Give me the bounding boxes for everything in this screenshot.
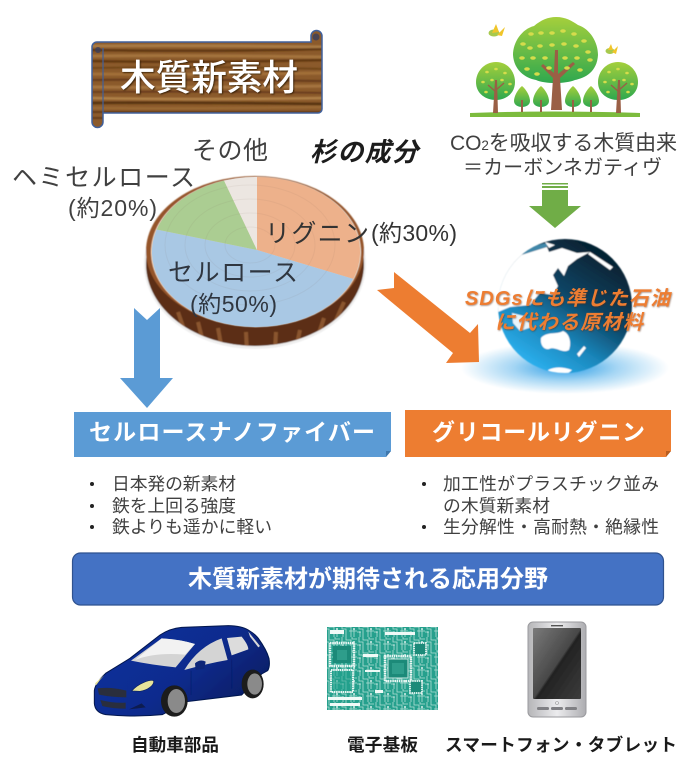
label: その他: その他 (192, 137, 268, 165)
banner: application fields: 木質新素材が期待される応用分野 (188, 565, 548, 593)
label: セルロース: (約50%) (190, 291, 277, 317)
panel: glycol lignin label: グリコールリグニン (432, 419, 645, 445)
list: glycol lignin features: 加工性がプラスチック並み (443, 474, 659, 494)
bird right (606, 44, 618, 54)
banner: application fields (72, 553, 664, 605)
label: ヘミセルロース (12, 164, 195, 221)
list: cellulose nanofiber features (90, 474, 272, 537)
top right chip (414, 643, 426, 655)
pie chart on wood slice (144, 175, 366, 349)
icon: blue car (94, 626, 269, 717)
label: リグニン: リグニン (265, 220, 369, 248)
label: セルロース: セルロース (168, 259, 298, 287)
pie slices (152, 177, 360, 327)
label: リグニン (265, 220, 457, 248)
panel: glycol lignin label (405, 410, 671, 457)
icon: circuit board (327, 627, 438, 710)
list: cellulose nanofiber features: 鉄よりも遥かに軽い (112, 517, 272, 537)
list: cellulose nanofiber features: 鉄を上回る強度 (112, 496, 236, 516)
text: carbon negative: ＝カーボンネガティヴ (463, 156, 662, 179)
wood side of slice (144, 176, 366, 352)
title: wooden scroll banner (90, 31, 325, 128)
icon: forest of trees with birds (470, 17, 640, 117)
callout: SDGs: に代わる原材料 (495, 312, 645, 334)
list: cellulose nanofiber features: 日本発の新素材 (112, 474, 236, 494)
icon: smartphone (528, 622, 586, 717)
caption: smartphones and tablets: スマートフォン・タブレット (445, 735, 677, 755)
list: glycol lignin features: の木質新素材 (443, 496, 550, 516)
title text: 木質新素材 (120, 57, 298, 98)
label: ヘミセルロース: ヘミセルロース (12, 164, 195, 192)
callout: SDGs (465, 287, 672, 334)
label: セルロース (168, 259, 298, 317)
list: glycol lignin features (422, 474, 659, 537)
label: ヘミセルロース: (約20%) (68, 195, 157, 221)
callout: SDGs: SDGsにも準じた石油 (465, 287, 672, 310)
solder rows (328, 630, 415, 706)
panel: cellulose nanofiber label: セルロースナノファイバー (89, 419, 375, 445)
label: リグニン: (約30%) (371, 220, 457, 246)
list: glycol lignin features: 生分解性・高耐熱・絶縁性 (443, 517, 659, 537)
globe with glow (461, 235, 669, 394)
text: carbon negative (450, 132, 677, 179)
lower right chip (410, 681, 422, 693)
caption: circuit boards: 電子基板 (347, 735, 418, 755)
bird left (488, 24, 505, 36)
arrow: orange diagonal (377, 272, 479, 363)
center chip (385, 656, 411, 681)
arrow: blue down (120, 308, 173, 408)
left upper chip (330, 643, 354, 666)
heading: 杉の成分: 杉の成分 (310, 137, 421, 167)
left lower block (331, 670, 353, 692)
panel: cellulose nanofiber label (74, 412, 391, 457)
caption: car parts: 自動車部品 (131, 735, 219, 755)
text: carbon negative: CO2を吸収する木質由来 (450, 132, 677, 155)
arrow: green down (529, 183, 581, 228)
